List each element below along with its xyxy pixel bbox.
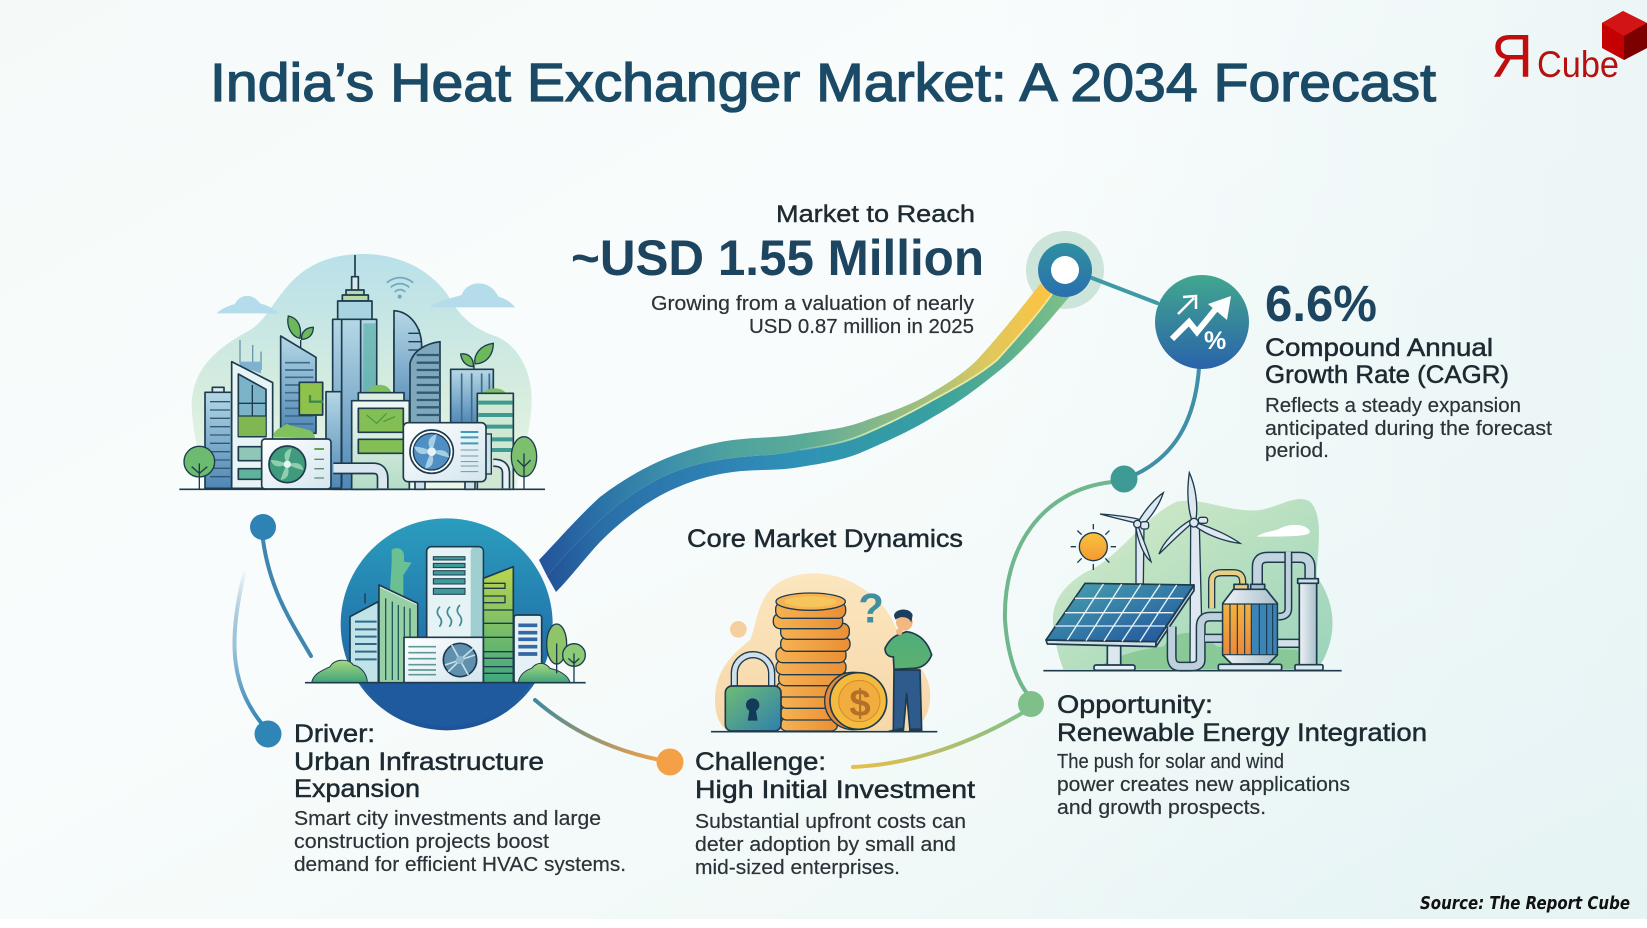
AC unit blue — [403, 423, 491, 489]
opportunity text block: The push for solar and wind — [1057, 750, 1284, 773]
leaves — [288, 316, 493, 370]
logo: RCube: Cube — [1537, 44, 1619, 85]
solar panel — [1046, 583, 1194, 670]
illustration: renewable energy with solar, wind and heat exchanger — [1043, 473, 1342, 671]
CAGR text block: anticipated during the forecast — [1265, 417, 1552, 440]
heat exchanger tank — [1218, 584, 1282, 670]
logo: RCube — [1491, 11, 1647, 90]
trees — [184, 437, 537, 489]
ring halo — [1026, 231, 1104, 309]
small turbine — [1100, 493, 1163, 584]
opportunity text block: and growth prospects. — [1057, 796, 1266, 819]
CAGR text block: Reflects a steady expansion — [1265, 394, 1521, 417]
driver text block: Urban Infrastructure — [294, 748, 544, 776]
pipes — [333, 463, 506, 488]
challenge text block: High Initial Investment — [695, 776, 975, 804]
icon: CAGR growth arrow: % — [1204, 327, 1226, 355]
icon: CAGR growth arrow — [1155, 275, 1249, 369]
coin stack — [773, 602, 850, 731]
AC unit green — [262, 439, 331, 489]
illustration: investment coins, lock and person — [711, 573, 937, 732]
pipes — [1172, 552, 1310, 667]
challenge text block — [695, 748, 975, 879]
left buildings — [205, 362, 273, 488]
CAGR text block: 6.6% — [1265, 275, 1377, 332]
market size callout: USD 0.87 million in 2025 — [749, 315, 974, 338]
core market dynamics heading: Core Market Dynamics — [687, 525, 963, 553]
challenge text block: Substantial upfront costs can — [695, 810, 966, 833]
column — [1295, 579, 1323, 670]
market size callout — [571, 201, 984, 338]
opportunity text block: Renewable Energy Integration — [1057, 719, 1427, 747]
illustration: driver disc with buildings — [305, 518, 586, 730]
sun — [1071, 524, 1116, 570]
logo: RCube: Я — [1491, 23, 1533, 90]
main tower — [281, 255, 377, 489]
driver text block: Smart city investments and large — [294, 807, 601, 830]
market size callout: ~USD 1.55 Million — [571, 230, 984, 286]
challenge text block: Challenge: — [695, 748, 826, 776]
market size callout: Growing from a valuation of nearly — [651, 292, 975, 315]
ring endpoint marker — [1038, 243, 1092, 297]
green block — [273, 385, 513, 489]
growth ribbon arrow — [539, 284, 1070, 592]
driver text block: construction projects boost — [294, 830, 549, 853]
challenge text block: mid-sized enterprises. — [695, 856, 900, 879]
gold coin: $ — [849, 682, 871, 725]
large turbine — [1159, 473, 1240, 663]
opportunity text block: power creates new applications — [1057, 773, 1350, 796]
challenge text block: deter adoption by small and — [695, 833, 956, 856]
opportunity text block: Opportunity: — [1057, 691, 1213, 719]
driver text block: Expansion — [294, 775, 420, 803]
opportunity text block — [1057, 691, 1427, 819]
title: India’s Heat Exchanger Market: A 2034 Forecast — [210, 54, 1436, 113]
illustration: investment coins, lock and person: ? — [858, 585, 884, 632]
connector lines — [234, 278, 1199, 767]
gold coin — [825, 672, 887, 730]
back buildings — [394, 311, 493, 424]
CAGR text block: period. — [1265, 439, 1329, 462]
driver text block: demand for efficient HVAC systems. — [294, 853, 626, 876]
illustration: smart city skyline — [179, 254, 545, 489]
CAGR text block: Compound Annual — [1265, 334, 1493, 362]
driver text block: Driver: — [294, 720, 375, 748]
timeline dots — [250, 466, 1138, 776]
padlock — [725, 655, 781, 731]
driver text block — [294, 720, 626, 876]
market size callout: Market to Reach — [776, 201, 975, 228]
CAGR text block: Growth Rate (CAGR) — [1265, 361, 1509, 389]
CAGR text block — [1265, 275, 1552, 462]
person — [885, 609, 932, 731]
